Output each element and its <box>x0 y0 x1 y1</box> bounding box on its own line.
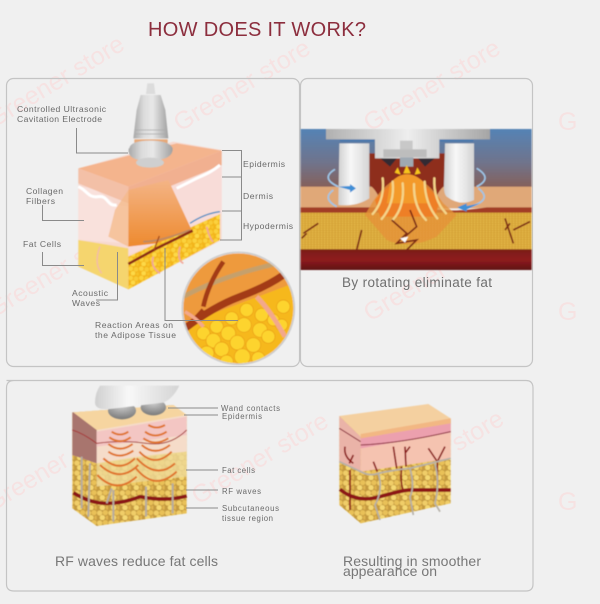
callout labels: tissue region <box>222 514 273 523</box>
callout labels: Filbers <box>26 196 55 206</box>
caption left: RF waves reduce fat cells <box>55 553 218 569</box>
caption right: appearance on <box>343 563 437 579</box>
leader lines <box>168 408 218 508</box>
callout labels: the Adipose Tissue <box>95 330 176 340</box>
watermarks: Greener store <box>169 34 315 137</box>
watermarks: G <box>558 108 577 136</box>
callout labels: Wand contacts <box>221 404 280 413</box>
icon: RF wand <box>95 386 179 419</box>
title: HOW DOES IT WORK? <box>148 19 366 41</box>
callout labels: Subcutaneous <box>222 504 279 513</box>
callout labels: Dermis <box>243 191 273 201</box>
panel: ultrasonic cavitation <box>6 78 300 368</box>
callout labels: Epidermis <box>243 159 285 169</box>
watermarks: Greener store <box>359 224 505 327</box>
callout labels: Fat Cells <box>23 239 61 249</box>
watermarks: Greener store <box>187 407 333 510</box>
callout labels: Epidermis <box>222 412 262 421</box>
callout labels: Reaction Areas on <box>95 320 173 330</box>
watermarks: Greener store <box>359 34 505 137</box>
callout labels: Cavitation Electrode <box>17 114 102 124</box>
result skin cube illustration <box>339 404 451 523</box>
callout labels: Hypodermis <box>243 221 293 231</box>
callout labels: Fat cells <box>222 466 255 475</box>
callout labels <box>221 404 280 523</box>
skin cube illustration <box>78 142 222 289</box>
watermarks: store <box>447 405 509 457</box>
rotating handpiece illustration <box>301 129 532 270</box>
callout labels: Waves <box>72 298 100 308</box>
panel: rotating eliminate fat <box>300 78 532 366</box>
watermarks: G <box>558 488 577 516</box>
icon: ultrasonic probe <box>129 83 173 168</box>
magnified adipose circle <box>182 252 295 368</box>
callout labels: Controlled Ultrasonic <box>17 104 107 114</box>
watermarks <box>0 30 577 517</box>
caption right <box>343 553 481 579</box>
callout labels: RF waves <box>222 487 261 496</box>
callout labels: Acoustic <box>72 288 109 298</box>
watermarks: G <box>558 298 577 326</box>
panel: RF waves <box>6 380 533 591</box>
callout labels <box>17 104 293 340</box>
callout labels: Collagen <box>26 186 63 196</box>
RF skin cube illustration <box>72 405 187 526</box>
caption: By rotating eliminate fat <box>342 275 492 290</box>
leader lines <box>42 128 242 320</box>
caption right: Resulting in smoother <box>343 553 481 569</box>
